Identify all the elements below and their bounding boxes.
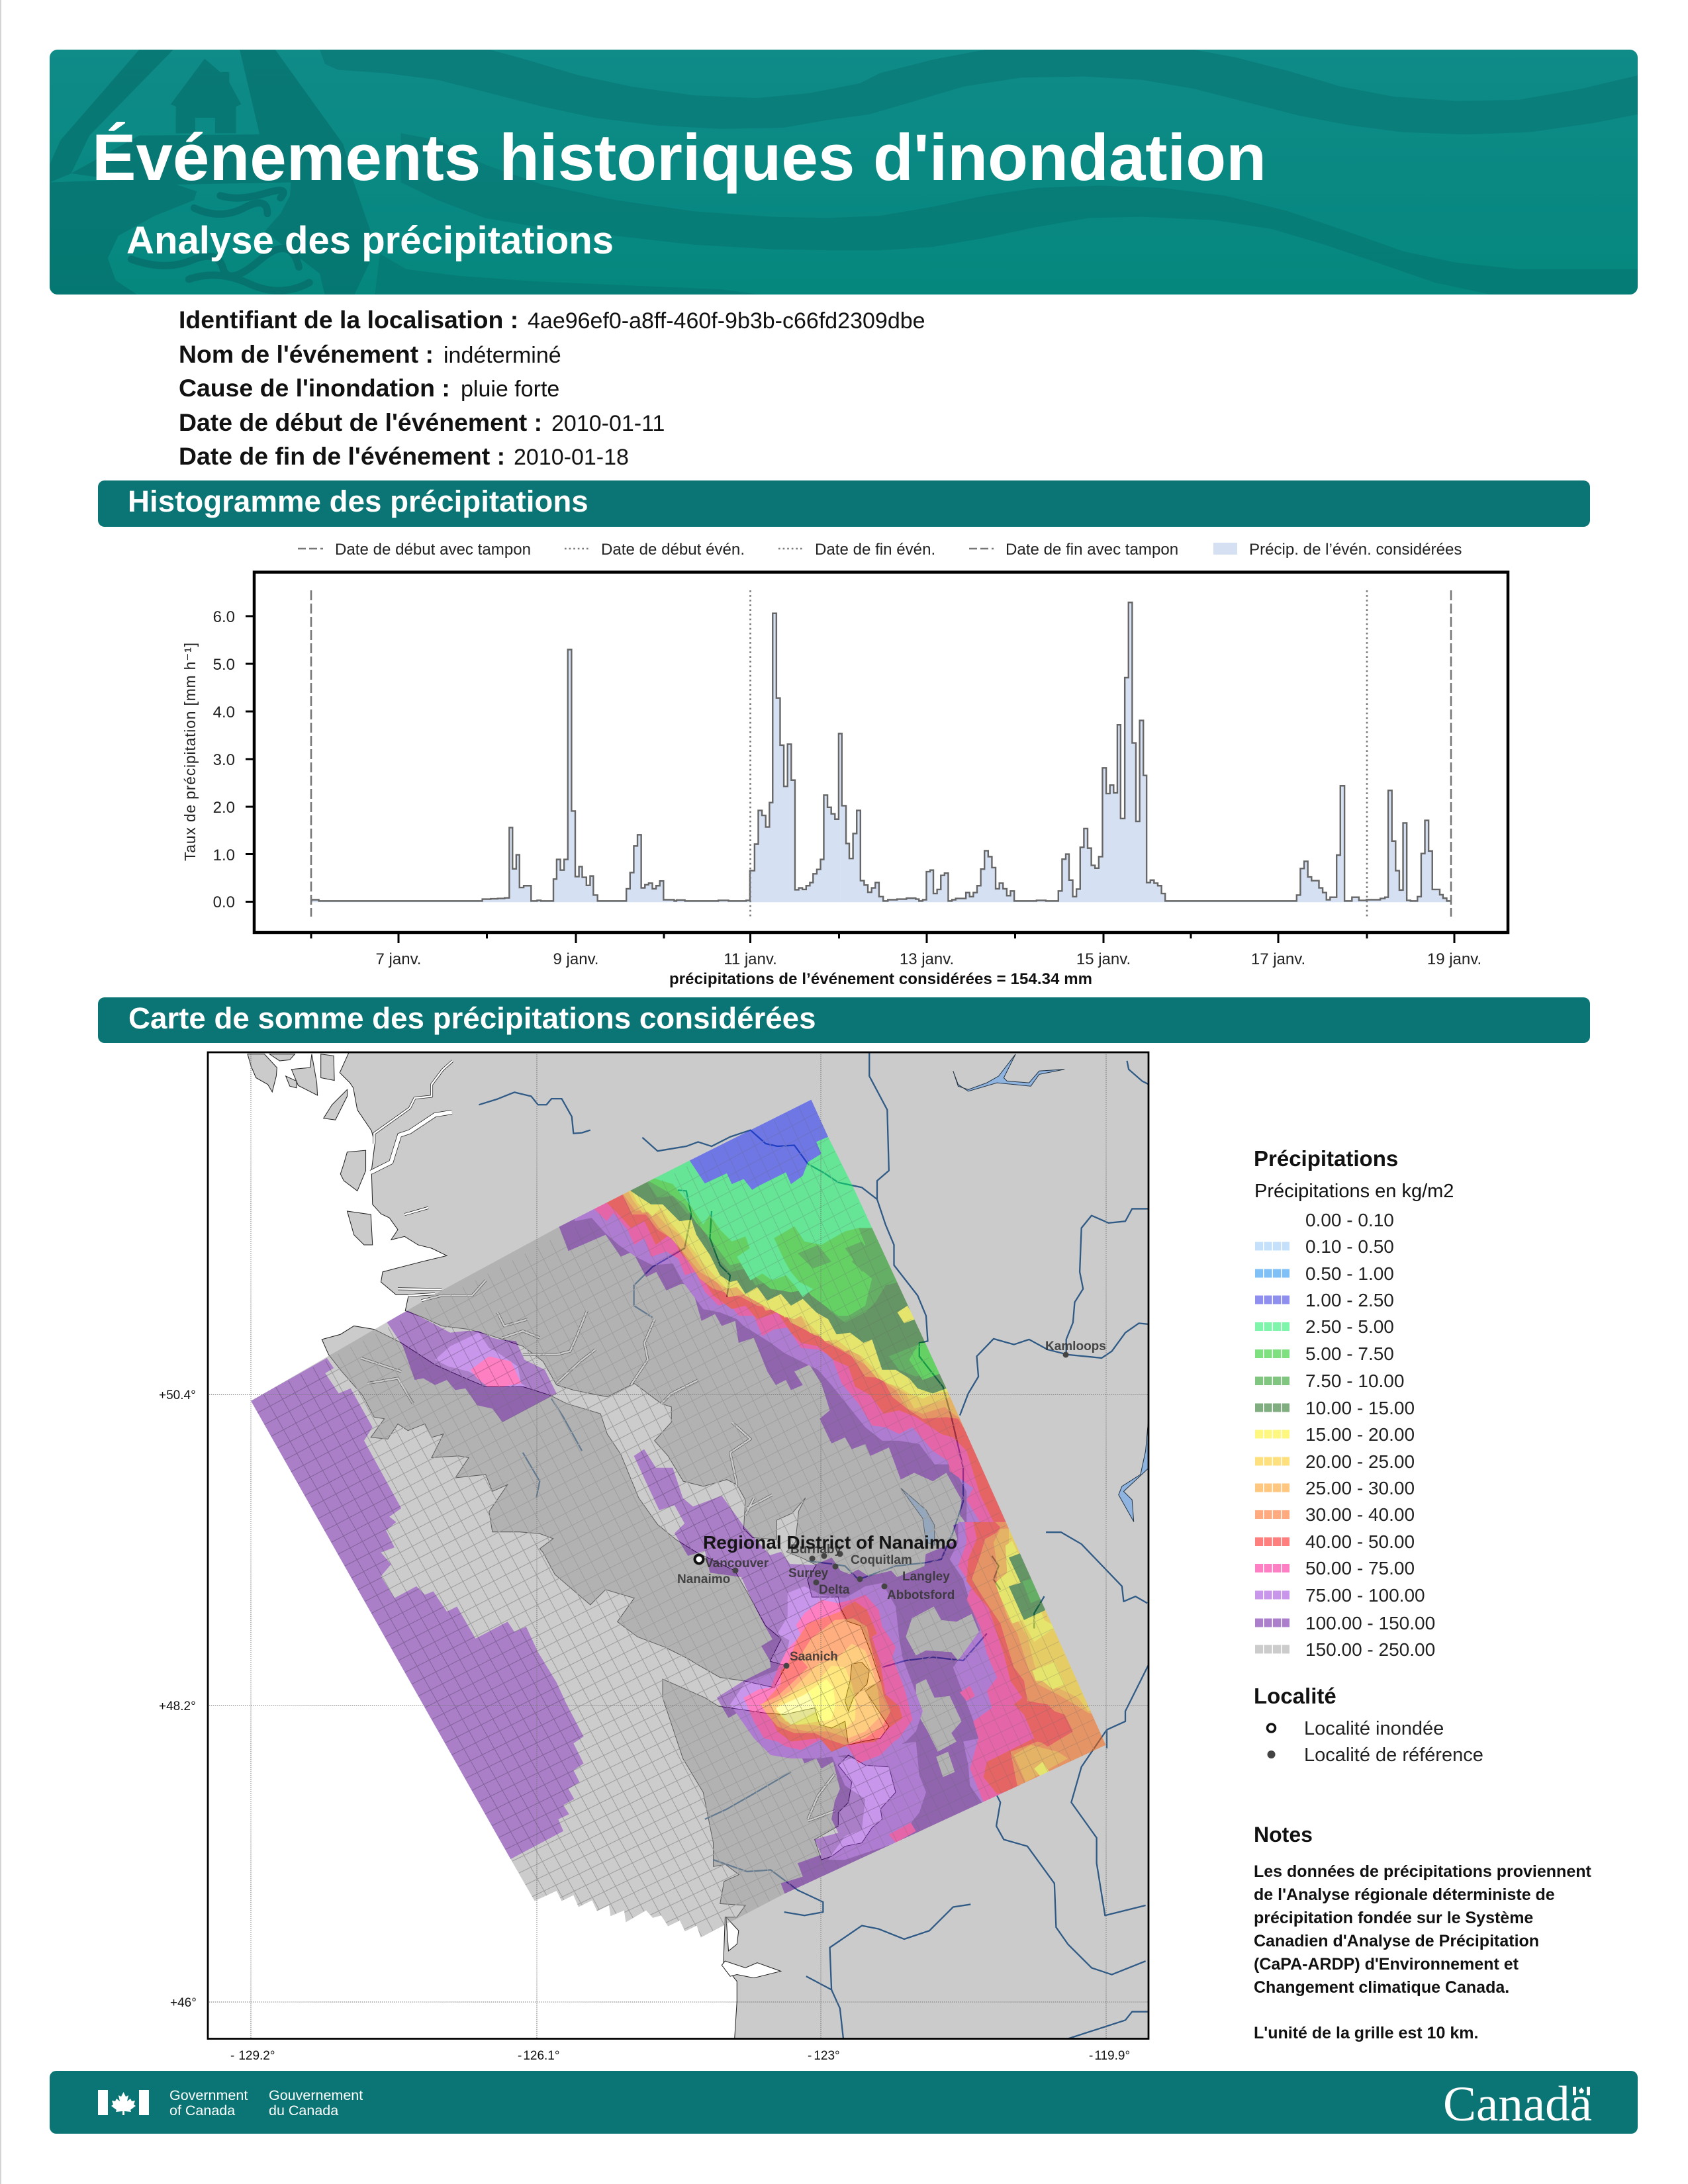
event name: Nom de l'événement : xyxy=(179,340,434,368)
legend: buffer end: Date de fin avec tampon xyxy=(1006,541,1178,559)
notes heading: Notes xyxy=(1254,1823,1313,1846)
longitude labels xyxy=(230,2049,1130,2063)
reference locality dots xyxy=(732,1351,1068,1669)
latitude labels xyxy=(159,1388,197,2010)
precipitation map xyxy=(159,1051,1149,2060)
header banner xyxy=(50,50,1638,296)
north-east band xyxy=(528,978,1169,1522)
longitude labels: - 129.2° xyxy=(230,2049,275,2063)
page edge line xyxy=(0,0,1,2184)
longitude labels: -123° xyxy=(808,2049,840,2063)
reference locality labels: Abbotsford xyxy=(887,1588,955,1602)
southern contours xyxy=(730,1522,1135,1860)
flooded locality label: Regional District of Nanaimo xyxy=(703,1532,957,1553)
x axis labels: 15 janv. xyxy=(1076,950,1131,968)
north island patch xyxy=(386,1311,557,1422)
y axis labels: 1.0 xyxy=(213,846,235,864)
Vancouver Island xyxy=(322,1326,786,1688)
latitude and longitude graticule xyxy=(207,1052,1149,2038)
end date: 2010-01-18 xyxy=(514,445,629,470)
x axis labels: 7 janv. xyxy=(376,950,421,968)
legend: considered precipitation: Précip. de l’évén. considérées xyxy=(1249,541,1462,559)
icon: Canadian flag xyxy=(98,2090,149,2115)
notes body: L'unité de la grille est 10 km. xyxy=(1254,2024,1478,2042)
government wordmark: Gouvernement xyxy=(269,2087,363,2103)
reference locality labels: Coquitlam xyxy=(851,1553,912,1567)
legend: event end: Date de fin évén. xyxy=(815,541,935,559)
reference locality labels: Burnaby xyxy=(790,1543,842,1557)
section heading: histogram: Histogramme des précipitations xyxy=(128,484,588,518)
reference locality text: Localité de référence xyxy=(1304,1745,1483,1766)
Canada wordmark: Canada xyxy=(1443,2077,1592,2132)
reference locality labels: Nanaimo xyxy=(677,1572,730,1586)
notes panel xyxy=(1254,1823,1591,2042)
notes body: précipitation fondée sur le Système xyxy=(1254,1909,1533,1927)
x axis labels: 13 janv. xyxy=(900,950,954,968)
legend value labels: 25.00 - 30.00 xyxy=(1305,1478,1415,1498)
flooded locality marker xyxy=(695,1555,703,1563)
flood cause: pluie forte xyxy=(461,377,559,402)
notes body: Canadien d'Analyse de Précipitation xyxy=(1254,1932,1539,1950)
event and buffer date lines xyxy=(311,590,1451,917)
mainland xyxy=(340,1052,1149,2038)
chart frame xyxy=(254,572,1508,933)
legend value labels: 0.50 - 1.00 xyxy=(1305,1263,1394,1284)
start date: 2010-01-11 xyxy=(551,411,665,436)
end date: Date de fin de l'événement : xyxy=(179,442,505,470)
legend value labels: 1.00 - 2.50 xyxy=(1305,1290,1394,1310)
flood cause: Cause de l'inondation : xyxy=(179,374,450,402)
y axis labels: 5.0 xyxy=(213,656,235,674)
start date: Date de début de l'événement : xyxy=(179,408,542,436)
legend value labels: 75.00 - 100.00 xyxy=(1305,1585,1425,1606)
locality heading: Localité xyxy=(1254,1684,1336,1708)
legend swatches xyxy=(1255,1246,1289,1649)
legend value labels: 150.00 - 250.00 xyxy=(1305,1639,1435,1660)
government wordmark xyxy=(169,2087,363,2118)
legend value labels: 5.00 - 7.50 xyxy=(1305,1343,1394,1364)
map background and overlay xyxy=(247,1053,1148,2038)
grey holes xyxy=(906,1606,987,1777)
reference locality symbol xyxy=(1267,1751,1275,1758)
legend: event start: Date de début évén. xyxy=(601,541,745,559)
reference locality labels xyxy=(677,1340,1106,1664)
fjords and channels xyxy=(361,1061,835,1821)
legend value labels: 40.00 - 50.00 xyxy=(1305,1531,1415,1552)
notes body: de l'Analyse régionale déterministe de xyxy=(1254,1886,1555,1904)
latitude labels: +50.4° xyxy=(159,1388,196,1402)
Puget Sound water xyxy=(815,1755,896,1860)
rivers xyxy=(479,1052,1149,2038)
map legend: precipitation xyxy=(1254,1146,1454,1660)
y axis labels: 0.0 xyxy=(213,893,235,911)
footer bar xyxy=(50,2071,1638,2134)
flooded locality text: Localité inondée xyxy=(1304,1718,1444,1739)
legend value labels: 0.00 - 0.10 xyxy=(1305,1210,1394,1230)
event name: indéterminé xyxy=(444,343,561,368)
title: Événements historiques d'inondation xyxy=(92,121,1266,195)
x axis labels: 9 janv. xyxy=(553,950,598,968)
map legend: locality xyxy=(1254,1684,1483,1766)
x axis labels: 19 janv. xyxy=(1427,950,1481,968)
west purple band xyxy=(232,1358,584,1860)
sliver inlet xyxy=(726,1917,739,1951)
event information block xyxy=(179,306,925,470)
reference locality labels: Vancouver xyxy=(705,1557,769,1570)
legend value labels: 100.00 - 150.00 xyxy=(1305,1613,1435,1633)
y axis labels: 6.0 xyxy=(213,608,235,626)
notes body: (CaPA-ARDP) d'Environnement et xyxy=(1254,1955,1519,1974)
flooded locality symbol xyxy=(1267,1724,1275,1732)
notes body: Les données de précipitations proviennent xyxy=(1254,1862,1591,1881)
precipitation grid colour layer xyxy=(251,1100,1105,1938)
section heading: map xyxy=(98,997,1590,1043)
chart ticks xyxy=(246,616,1454,943)
government wordmark: du Canada xyxy=(269,2103,338,2118)
legend value labels: 30.00 - 40.00 xyxy=(1305,1504,1415,1525)
longitude labels: -126.1° xyxy=(518,2049,559,2063)
legend value labels: 15.00 - 20.00 xyxy=(1305,1424,1415,1445)
x axis labels xyxy=(376,950,1481,968)
legend value labels: 50.00 - 75.00 xyxy=(1305,1558,1415,1578)
Columbia estuary xyxy=(722,1961,781,1978)
legend: buffer start: Date de début avec tampon xyxy=(335,541,531,559)
histogram steps left part xyxy=(311,614,841,902)
y axis labels xyxy=(213,608,235,911)
notes body xyxy=(1254,1862,1591,2042)
longitude labels: -119.9° xyxy=(1089,2049,1130,2063)
reference locality labels: Saanich xyxy=(790,1650,838,1664)
legend value labels: 10.00 - 15.00 xyxy=(1305,1398,1415,1418)
reference locality labels: Kamloops xyxy=(1045,1340,1106,1353)
precipitation histogram chart xyxy=(181,572,1508,988)
legend value labels: 2.50 - 5.00 xyxy=(1305,1316,1394,1337)
government wordmark: of Canada xyxy=(169,2103,235,2118)
grid lines xyxy=(258,1107,1100,1985)
map frame xyxy=(208,1052,1149,2038)
subtitle: Analyse des précipitations xyxy=(126,219,614,262)
government wordmark: Government xyxy=(169,2087,248,2103)
legend value labels: 0.10 - 0.50 xyxy=(1305,1236,1394,1257)
section heading: histogram xyxy=(98,480,1590,527)
reference locality labels: Delta xyxy=(819,1583,850,1597)
x axis labels: 17 janv. xyxy=(1251,950,1305,968)
legend heading: Précipitations xyxy=(1254,1146,1398,1171)
notes body: Changement climatique Canada. xyxy=(1254,1978,1509,1997)
location id: Identifiant de la localisation : xyxy=(179,306,518,334)
legend value labels: 20.00 - 25.00 xyxy=(1305,1451,1415,1472)
legend subtitle: Précipitations en kg/m2 xyxy=(1254,1181,1454,1202)
y axis labels: 4.0 xyxy=(213,704,235,721)
latitude labels: +48.2° xyxy=(159,1700,196,1713)
y axis title: Taux de précipitation [mm h⁻¹] xyxy=(181,643,199,861)
total precipitation caption: précipitations de l’événement considérées = 154.34 mm xyxy=(669,970,1092,988)
legend value labels xyxy=(1305,1210,1435,1660)
section heading: map: Carte de somme des précipitations considérées xyxy=(128,1001,816,1035)
main contours, south coordinates xyxy=(559,1218,984,1894)
lakes xyxy=(901,1054,1149,1545)
y axis labels: 3.0 xyxy=(213,751,235,769)
legend value labels: 7.50 - 10.00 xyxy=(1305,1371,1404,1391)
reference locality labels: Langley xyxy=(902,1570,950,1584)
location id: 4ae96ef0-a8ff-460f-9b3b-c66fd2309dbe xyxy=(528,308,925,334)
house and water-drop logo xyxy=(50,50,371,296)
latitude labels: +46° xyxy=(170,1996,197,2010)
reference locality labels: Surrey xyxy=(788,1567,829,1580)
decorative waves xyxy=(50,50,1638,296)
histogram steps right part xyxy=(839,602,1451,902)
x axis labels: 11 janv. xyxy=(724,950,777,968)
y axis labels: 2.0 xyxy=(213,799,235,817)
chart legend xyxy=(298,541,1462,559)
coastal islands xyxy=(248,1054,869,1711)
